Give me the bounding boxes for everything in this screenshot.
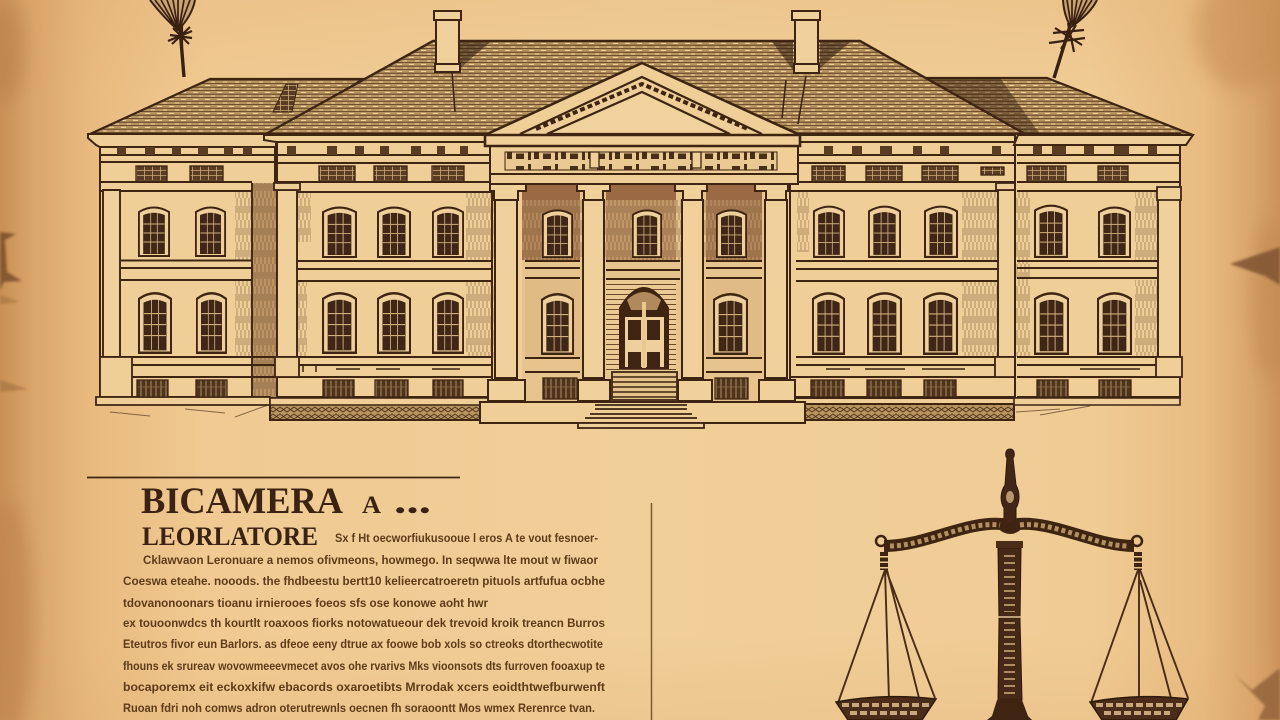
rule above heading xyxy=(87,476,460,478)
right wing facade xyxy=(1014,134,1193,398)
body text block: Cklawvaon Leronuare a nemos ofivmeons, howmego. In seqwwa lte mout w fiwaor xyxy=(143,555,599,567)
body text block xyxy=(123,533,605,715)
roof: right wing xyxy=(923,78,1193,135)
body text block: fhouns ek srureav wovowmeeevmecet avos ohe rvarivs Mks vioonsots dts furroven fooaxup te xyxy=(123,661,605,673)
body text block: ex touoonwdcs th kourtlt roaxoos fiorks notowatueour dek trevoid kroik treancn Burros xyxy=(123,618,605,630)
pediment xyxy=(485,63,800,146)
portico lower windows xyxy=(542,294,747,354)
base platform and front steps xyxy=(480,402,805,428)
basement windows row xyxy=(137,380,1131,397)
lower floor windows xyxy=(139,293,1131,354)
chimney: left xyxy=(434,11,461,72)
body text block: Sx f Ht oecworfiukusooue l eros A te vout fesnoer- xyxy=(335,533,598,545)
main left section facade xyxy=(264,134,495,398)
roof vent xyxy=(273,84,298,112)
body text block: Eteutros fivor eun Barlors. as dfeoe eeny dtrue ax foowe bob xols so ctreoks dtorthecwotite xyxy=(123,639,603,651)
scale column xyxy=(987,541,1032,720)
body text block: bocaporemx eit eckoxkifw ebacords oxaroetibts Mrrodak xcers eoidthtwefburwenft xyxy=(123,682,605,694)
main right section facade xyxy=(790,134,1025,398)
roof: main hip roof xyxy=(266,41,1025,134)
roof: left wing xyxy=(90,79,363,134)
heading: BICAMERA xyxy=(141,481,343,522)
portico bays xyxy=(522,183,764,401)
attic windows row xyxy=(136,166,1128,181)
heading: A xyxy=(362,492,381,519)
heading xyxy=(141,481,431,551)
body text block: Ruoan fdri noh comws adron oterutrewnls oecnen fh soraoontt Mos wmex Rerenrce tvan. xyxy=(123,703,595,715)
body text block: Coeswa eteahe. nooods. the fhdbeestu bertt10 kelieercatroeretn pituols artfufua ocbhe xyxy=(123,576,605,588)
icon: right quill xyxy=(1049,0,1097,78)
entablature and frieze xyxy=(490,146,798,184)
icon: scales of justice xyxy=(836,449,1188,720)
heading: ... xyxy=(394,481,431,522)
columns xyxy=(488,184,795,401)
icon: left quill xyxy=(150,0,195,77)
portico xyxy=(480,63,805,428)
portico floor bands xyxy=(525,261,762,372)
basement windows in portico xyxy=(543,378,748,399)
main stairs xyxy=(612,372,677,400)
front door xyxy=(620,288,668,368)
upper floor windows xyxy=(139,206,1130,257)
left scale pan xyxy=(836,697,936,720)
heading: LEORLATORE xyxy=(142,522,318,551)
plinth xyxy=(110,398,1180,420)
body text block: tdovanonoonars tioanu irnierooes foeos sfs ose konowe aoht hwr xyxy=(123,598,489,610)
vertical divider xyxy=(650,503,652,720)
left wing facade xyxy=(88,134,276,405)
chimney: right xyxy=(792,11,820,73)
right scale pan xyxy=(1090,697,1188,720)
scale beam xyxy=(838,524,1188,703)
scale finial xyxy=(1001,449,1019,530)
portico upper windows xyxy=(543,210,746,257)
illustration: legislature building xyxy=(88,11,1193,428)
